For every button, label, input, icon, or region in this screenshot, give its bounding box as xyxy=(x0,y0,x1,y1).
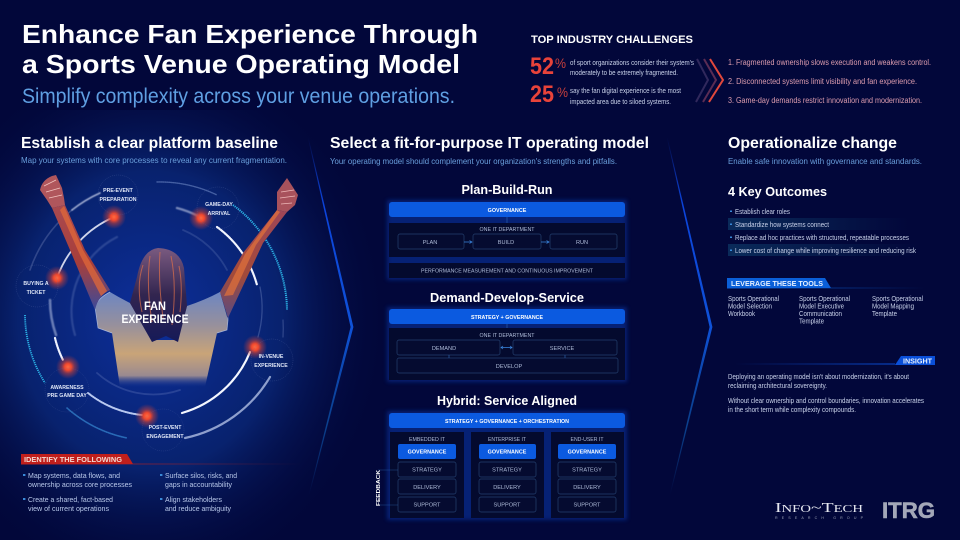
heading: operationalize change: Operationalize change xyxy=(728,135,897,152)
banner: leverage these tools xyxy=(727,278,925,288)
stat: 25 percent: 25 xyxy=(530,81,554,108)
tool: executive communication template: Template xyxy=(799,316,824,326)
column: embedded IT: GOVERNANCE xyxy=(408,450,447,456)
panel: one IT department: PLAN xyxy=(423,240,437,246)
node: post-event engagement: ENGAGEMENT xyxy=(146,434,184,440)
bar: strategy + governance + orchestration: STRATEGY + GOVERNANCE + ORCHESTRATION xyxy=(445,419,569,425)
rings xyxy=(25,182,287,438)
node: in-venue experience xyxy=(243,335,293,381)
divider arrow: center to right xyxy=(667,137,712,495)
logo: ITRG: ITRG xyxy=(882,498,935,523)
panel: one IT department: DEVELOP xyxy=(496,364,522,370)
column: enterprise IT: ENTERPRISE IT xyxy=(488,437,527,443)
text: insight body: Deploying an operating model isn't about modernization, it's about xyxy=(728,372,909,381)
tool: selection workbook xyxy=(728,294,779,318)
diagram: plan-build-run xyxy=(387,182,627,280)
panel: 4 key outcomes xyxy=(728,184,918,256)
panel: 4 key outcomes: Establish clear roles xyxy=(735,207,790,216)
column: end-user IT xyxy=(551,432,624,518)
panel: identify the following xyxy=(21,454,301,513)
node: in-venue experience: EXPERIENCE xyxy=(254,363,288,369)
column: embedded IT: SUPPORT xyxy=(414,502,441,508)
tool: executive communication template: Communication xyxy=(799,309,842,318)
panel: one IT department: RUN xyxy=(576,240,588,246)
list: numbered challenges: 3. Game-day demands restrict innovation and modernization. xyxy=(728,96,922,105)
column: enterprise IT: GOVERNANCE xyxy=(488,450,527,456)
chart: fan experience journey ring xyxy=(16,175,298,451)
column: end-user IT: DELIVERY xyxy=(573,485,601,491)
node: post-event engagement: POST-EVENT xyxy=(149,425,182,431)
bullets: left column xyxy=(23,471,132,513)
bullets: left column: Map systems, data flows, and xyxy=(28,471,120,480)
label: center: FAN xyxy=(144,299,166,313)
list: numbered challenges xyxy=(728,58,931,105)
stat: 25 percent: impacted area due to siloed systems. xyxy=(570,97,671,106)
node: buying a ticket: BUYING A xyxy=(23,281,49,287)
bullets: left column: ownership across core processes xyxy=(28,480,132,489)
column: enterprise IT: SUPPORT xyxy=(494,502,521,508)
heading: select operating model: Your operating model should complement your organization's strengths and pitfalls. xyxy=(330,157,617,166)
node: buying a ticket xyxy=(16,265,69,307)
stat: 52 percent: % xyxy=(555,55,566,71)
node: game-day arrival xyxy=(189,187,239,230)
node: game-day arrival: ARRIVAL xyxy=(208,211,231,217)
text: insight body: reclaiming architectural sovereignty. xyxy=(728,381,827,390)
text: insight body xyxy=(728,372,924,414)
panel: 4 key outcomes: Lower cost of change while improving resilience and reducing risk xyxy=(735,246,916,255)
bar: strategy + governance + orchestration xyxy=(389,413,625,428)
diagram: demand-develop-service: Demand-Develop-Service xyxy=(430,290,584,305)
column: embedded IT: EMBEDDED IT xyxy=(409,437,446,443)
heading: operationalize change xyxy=(728,135,922,166)
node: pre-event preparation: PREPARATION xyxy=(100,197,137,203)
panel: establish baseline heading xyxy=(21,135,287,165)
stat: 25 percent: % xyxy=(557,84,568,100)
stat: 52 percent: 52 xyxy=(530,53,554,80)
panel: 4 key outcomes: Replace ad hoc practices with structured, repeatable processes xyxy=(735,233,909,242)
panel: performance measurement: PERFORMANCE MEASUREMENT AND CONTINUOUS IMPROVEMENT xyxy=(421,268,594,274)
list: numbered challenges: 2. Disconnected systems limit visibility and fan experience. xyxy=(728,77,917,86)
panel: one IT department: BUILD xyxy=(498,240,514,246)
diagram: hybrid service aligned xyxy=(376,393,627,520)
logo: info-tech research group: INFO ~T ECH xyxy=(775,501,864,516)
tool: mapping template: Sports Operational xyxy=(872,294,923,303)
bar: governance xyxy=(389,202,625,217)
panel: one IT department xyxy=(389,324,625,380)
tool: executive communication template: Sports Operational xyxy=(799,294,850,303)
label: center xyxy=(122,299,188,326)
bullets: right column: and reduce ambiguity xyxy=(165,504,231,513)
tool: executive communication template: Model Executive xyxy=(799,302,844,310)
node: in-venue experience: IN-VENUE xyxy=(259,354,284,360)
bullets: right column: gaps in accountability xyxy=(165,480,232,489)
bullets: right column xyxy=(160,471,237,513)
tool: mapping template: Model Mapping xyxy=(872,302,914,310)
bullets: right column: Surface silos, risks, and xyxy=(165,471,237,480)
bullets: left column: view of current operations xyxy=(28,504,109,513)
column: end-user IT: GOVERNANCE xyxy=(568,450,607,456)
node: awareness pre game day: PRE GAME DAY xyxy=(47,393,87,399)
node: pre-event preparation: PRE-EVENT xyxy=(103,188,134,194)
column: enterprise IT xyxy=(471,432,544,518)
panel: insight xyxy=(728,356,935,414)
panel: leverage these tools xyxy=(727,278,925,326)
title: Enhance Fan Experience Through xyxy=(22,19,478,49)
stat: 52 percent: of sport organizations consider their system's xyxy=(570,58,694,67)
panel: performance measurement xyxy=(389,263,625,278)
label: center: EXPERIENCE xyxy=(122,312,188,326)
node: awareness pre game day xyxy=(45,355,89,412)
banner: leverage these tools: LEVERAGE THESE TOOLS xyxy=(731,279,823,288)
bar: strategy + governance xyxy=(389,309,625,324)
tool: mapping template xyxy=(872,294,923,318)
heading: select operating model xyxy=(330,135,649,166)
panel: one IT department: SERVICE xyxy=(550,346,574,352)
list: numbered challenges: 1. Fragmented ownership slows execution and weakens control. xyxy=(728,58,931,67)
node: pre-event preparation xyxy=(98,175,138,229)
panel: top industry challenges xyxy=(530,34,931,108)
column: embedded IT: DELIVERY xyxy=(413,485,441,491)
panel: 4 key outcomes: 4 Key Outcomes xyxy=(728,184,827,199)
node: game-day arrival: GAME-DAY xyxy=(205,202,233,208)
tool: selection workbook: Workbook xyxy=(728,309,755,318)
figure: fan with raised arms xyxy=(40,175,298,387)
column: enterprise IT: STRATEGY xyxy=(492,468,522,474)
heading: top industry challenges: TOP INDUSTRY CHALLENGES xyxy=(531,34,693,46)
stat: 25 percent xyxy=(530,81,681,108)
panel: one IT department: ONE IT DEPARTMENT xyxy=(480,227,535,233)
stat: 52 percent: moderately to be extremely fragmented. xyxy=(570,68,678,77)
logo: info-tech research group: RESEARCH GROUP xyxy=(775,516,864,520)
stat: 52 percent xyxy=(530,53,694,80)
panel: 4 key outcomes: Standardize how systems connect xyxy=(735,220,829,229)
bullets: left column: Create a shared, fact-based xyxy=(28,495,113,504)
feedback label: FEEDBACK xyxy=(376,470,382,506)
panel: establish baseline heading: Map your systems with core processes to reveal any current fragmentation. xyxy=(21,156,287,165)
banner: insight: INSIGHT xyxy=(903,356,933,366)
banner: identify the following: IDENTIFY THE FOLLOWING xyxy=(24,455,122,464)
bar: strategy + governance: STRATEGY + GOVERNANCE xyxy=(471,315,543,321)
tool: selection workbook: Sports Operational xyxy=(728,294,779,303)
tool: executive communication template xyxy=(799,294,850,326)
tool: selection workbook: Model Selection xyxy=(728,302,772,310)
bar: governance: GOVERNANCE xyxy=(488,208,527,214)
diagram: demand-develop-service xyxy=(387,290,627,382)
icon: triple chevron arrow xyxy=(696,59,723,102)
panel: one IT department: DEMAND xyxy=(432,346,456,352)
node: buying a ticket: TICKET xyxy=(27,290,46,296)
heading: operationalize change: Enable safe innovation with governance and standards. xyxy=(728,157,922,166)
diagram: hybrid service aligned: Hybrid: Service Aligned xyxy=(437,393,577,408)
text: insight body: Without clear ownership and control boundaries, innovation accelerates xyxy=(728,396,924,405)
column: enterprise IT: DELIVERY xyxy=(493,485,521,491)
column: end-user IT: SUPPORT xyxy=(574,502,601,508)
panel: establish baseline heading: Establish a clear platform baseline xyxy=(21,135,278,152)
node: awareness pre game day: AWARENESS xyxy=(50,385,84,391)
title: a Sports Venue Operating Model xyxy=(22,49,460,79)
column: end-user IT: END-USER IT xyxy=(570,437,604,443)
column: embedded IT xyxy=(390,432,464,518)
panel: one IT department xyxy=(389,217,625,257)
banner: insight xyxy=(735,356,935,366)
tool: mapping template: Template xyxy=(872,309,897,318)
text: insight body: in the short term while complexity compounds. xyxy=(728,405,856,414)
node: post-event engagement xyxy=(135,404,184,451)
title xyxy=(22,19,478,79)
panel: one IT department: ONE IT DEPARTMENT xyxy=(480,333,535,339)
divider arrow: left to center xyxy=(308,137,353,495)
banner: identify the following xyxy=(21,454,301,464)
diagram: plan-build-run: Plan-Build-Run xyxy=(462,182,553,197)
subtitle: Simplify complexity across your venue operations. xyxy=(22,85,455,108)
bullets: right column: Align stakeholders xyxy=(165,495,222,504)
column: embedded IT: STRATEGY xyxy=(412,468,442,474)
column: end-user IT: STRATEGY xyxy=(572,468,602,474)
feedback label xyxy=(376,470,398,506)
stat: 25 percent: say the fan digital experience is the most xyxy=(570,86,681,95)
heading: select operating model: Select a fit-for-purpose IT operating model xyxy=(330,135,649,152)
